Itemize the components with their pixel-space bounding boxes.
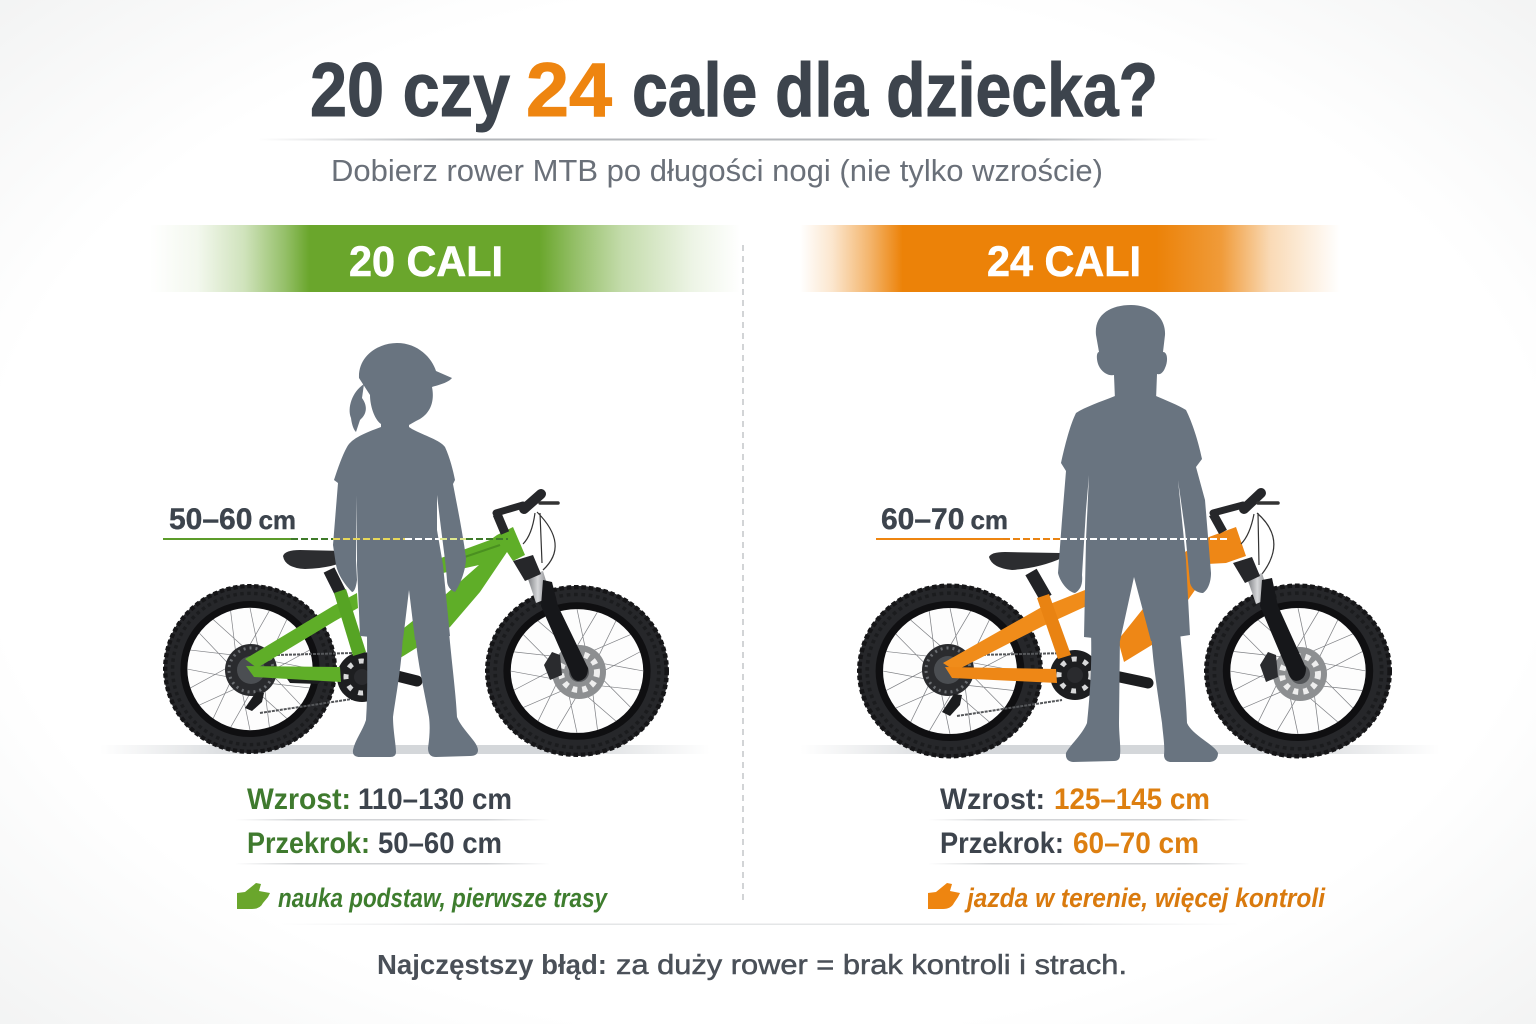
orange bike	[858, 493, 1391, 758]
verdict: 24 cale: jazda w terenie, więcej kontroli	[964, 883, 1325, 913]
stats: 24 cale: Przekrok:	[940, 827, 1064, 860]
rear wheel	[164, 585, 336, 753]
insertion dashes: orange	[876, 538, 1228, 540]
bottom note	[377, 949, 1127, 980]
icon: orange thumbs up	[928, 883, 960, 909]
header band: 20 cali: 20 CALI	[349, 238, 503, 286]
green bike	[164, 494, 668, 756]
header band: 24 cali	[800, 225, 1340, 292]
bottom note: za duży rower = brak kontroli i strach.	[616, 949, 1127, 980]
title: 24	[526, 48, 612, 133]
stats: 20 cali: Wzrost:	[247, 783, 351, 816]
header band: 20 cali	[150, 225, 740, 292]
silhouette: boy	[1058, 305, 1218, 762]
front wheel	[486, 586, 668, 756]
title	[310, 48, 1158, 133]
silhouette: girl	[333, 343, 478, 757]
stats: 20 cali	[235, 783, 550, 864]
stats: 24 cale: 60–70 cm	[1073, 827, 1199, 860]
front wheel	[1205, 584, 1391, 758]
stats: 20 cali: Przekrok:	[247, 827, 370, 860]
insertion dashes: green	[163, 538, 508, 540]
stats: 24 cale: Wzrost:	[940, 783, 1045, 816]
title: cale dla dziecka?	[632, 48, 1158, 133]
stats: 20 cali: 50–60 cm	[378, 827, 502, 860]
bottom note: Najczęstszy błąd:	[377, 949, 607, 980]
stats: 20 cali: 110–130 cm	[358, 783, 512, 816]
icon: green thumbs up	[237, 883, 270, 909]
subtitle: Dobierz rower MTB po długości nogi (nie tylko wzroście)	[331, 153, 1103, 188]
stats: 24 cale: 125–145 cm	[1054, 783, 1210, 816]
label: 60-70 cm: 60–70cm	[881, 503, 1008, 536]
verdict: 20 cali: nauka podstaw, pierwsze trasy	[278, 883, 609, 913]
rear wheel	[858, 584, 1042, 758]
title: 20 czy	[310, 48, 510, 133]
header band: 24 cali: 24 CALI	[987, 238, 1141, 286]
stats: 24 cale	[928, 783, 1250, 864]
label: 50-60 cm: 50–60cm	[169, 503, 296, 536]
